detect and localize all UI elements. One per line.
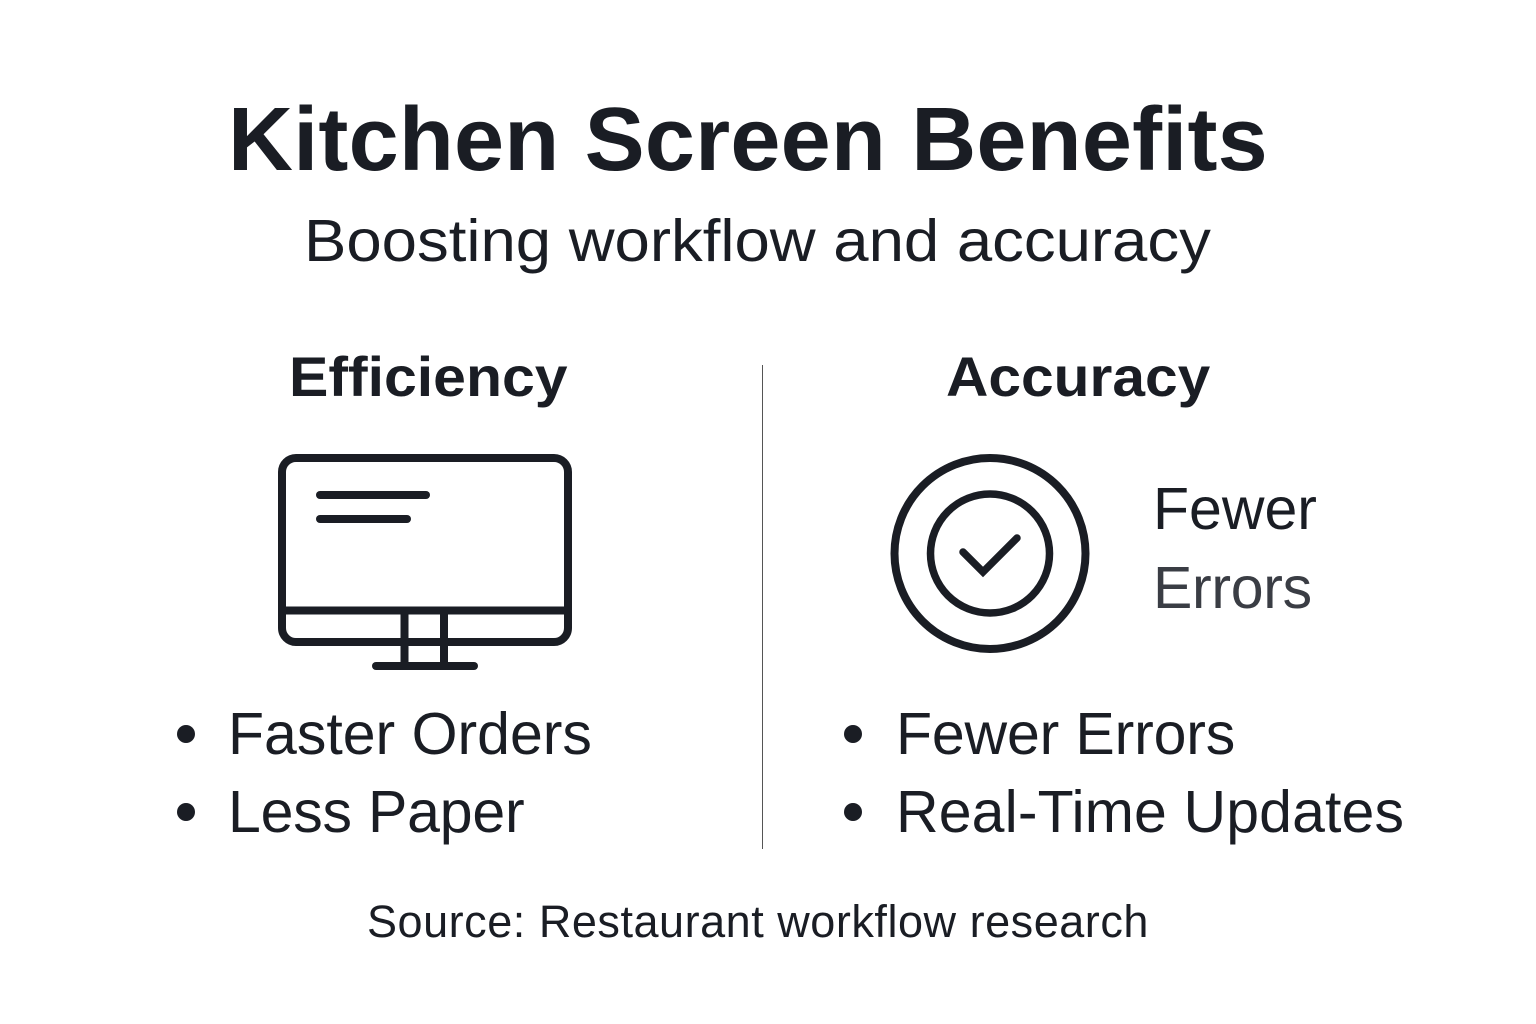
icon: monitor	[278, 454, 572, 670]
title: Kitchen Screen Benefits	[228, 90, 1268, 190]
icon: check circle	[890, 454, 1090, 653]
bullet: less paper: Less Paper	[228, 779, 524, 845]
source note: Source: Restaurant workflow research	[367, 896, 1149, 947]
bullet: real-time updates: Real-Time Updates	[896, 779, 1404, 845]
callout: fewer errors: Fewer	[1153, 476, 1317, 542]
callout: fewer errors: Errors	[1153, 555, 1312, 621]
divider	[762, 365, 763, 849]
bullet: faster orders: Faster Orders	[228, 701, 592, 767]
heading: accuracy: Accuracy	[946, 345, 1210, 408]
accuracy list	[844, 701, 1404, 845]
heading: efficiency: Efficiency	[289, 345, 568, 408]
efficiency list	[177, 701, 592, 845]
callout: fewer errors	[1153, 476, 1317, 621]
subtitle: Boosting workflow and accuracy	[304, 208, 1211, 274]
bullet: fewer errors: Fewer Errors	[896, 701, 1235, 767]
